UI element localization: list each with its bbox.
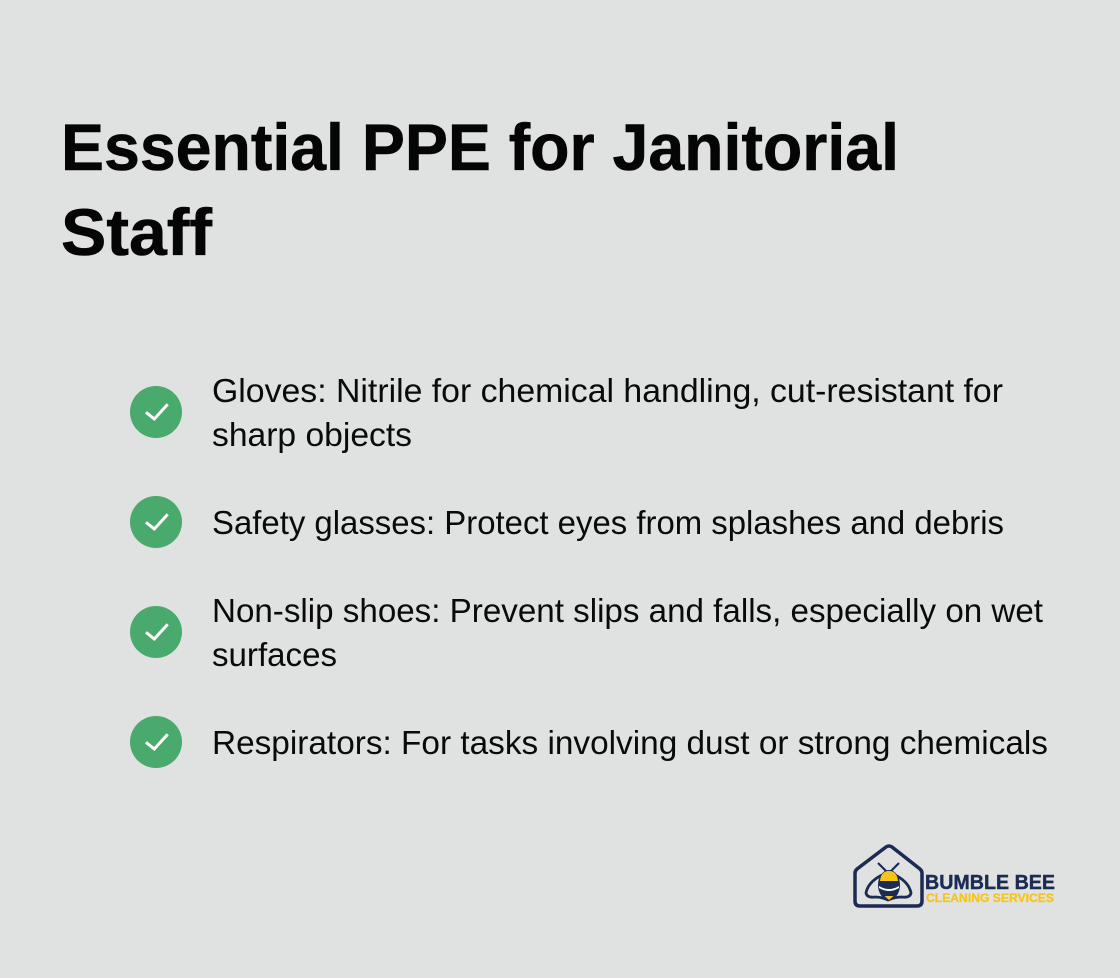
text: respirators: Respirators: For tasks involving dust or strong chemicals xyxy=(212,724,1048,761)
title: Staff xyxy=(61,195,213,269)
logo: Bumble Bee Cleaning Services: CLEANING SERVICES xyxy=(926,891,1054,905)
list item: safety glasses xyxy=(130,496,1004,548)
logo: Bumble Bee Cleaning Services xyxy=(855,846,1055,906)
text: gloves: Gloves: Nitrile for chemical handling, cut-resistant for xyxy=(212,372,1003,409)
text: gloves: sharp objects xyxy=(212,416,412,453)
icon: check respirators xyxy=(130,716,182,768)
logo text: BUMBLE BEE xyxy=(925,872,1055,894)
icon: check non-slip shoes xyxy=(130,606,182,658)
title xyxy=(61,110,899,269)
text: non-slip shoes: surfaces xyxy=(212,636,337,673)
list item: non-slip shoes xyxy=(130,592,1043,673)
text: gloves xyxy=(212,372,1003,453)
title: Essential PPE for Janitorial xyxy=(61,110,899,184)
text: non-slip shoes xyxy=(212,592,1043,673)
list item: gloves xyxy=(130,372,1003,453)
text: non-slip shoes: Non-slip shoes: Prevent slips and falls, especially on wet xyxy=(212,592,1043,629)
icon: check gloves xyxy=(130,386,182,438)
icon: house outline xyxy=(855,846,922,906)
text: safety glasses: Safety glasses: Protect eyes from splashes and debris xyxy=(212,504,1004,541)
icon: bee xyxy=(866,863,911,900)
list item: respirators xyxy=(130,716,1048,768)
icon: check safety glasses xyxy=(130,496,182,548)
